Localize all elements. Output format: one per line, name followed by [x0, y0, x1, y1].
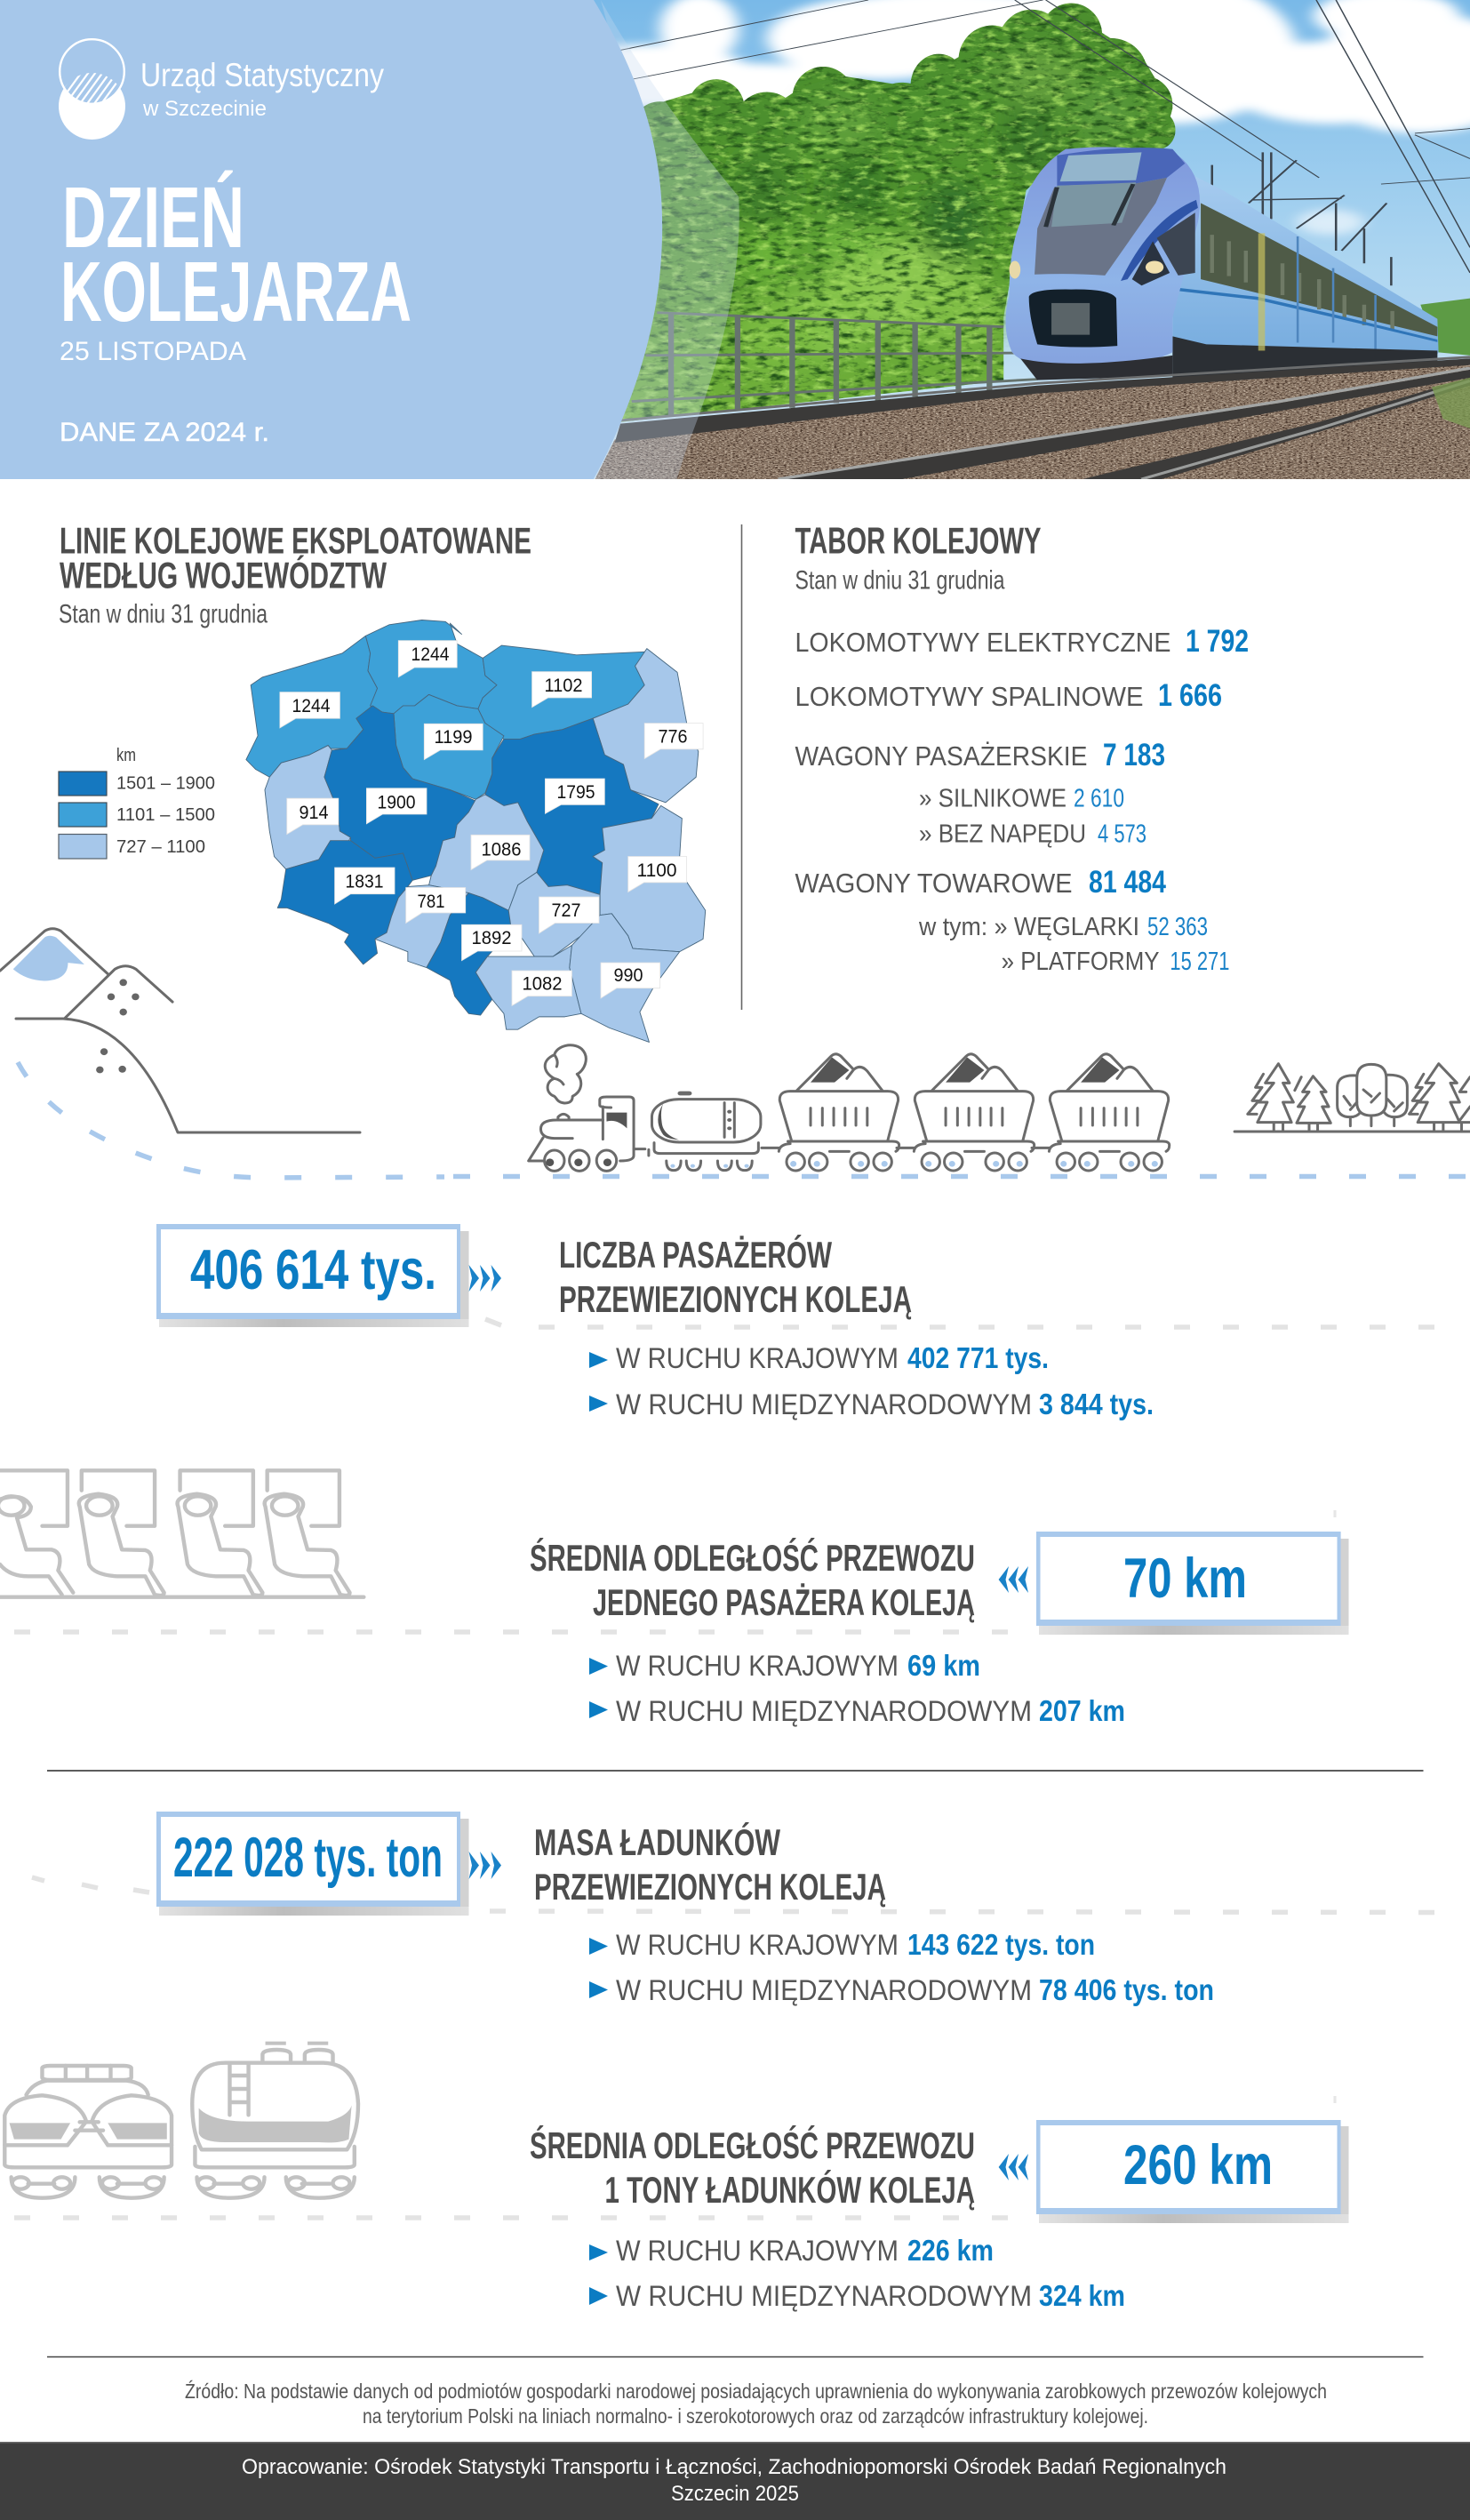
map of Poland: [246, 620, 706, 1042]
row: domestic freight: W RUCHU KRAJOWYM: [616, 1929, 899, 1961]
map legend: 1501 – 1900: [116, 773, 215, 793]
title: KOLEJARZA: [60, 244, 411, 340]
stat box: 70 km: [1036, 1532, 1349, 1635]
heading: freight mass: [534, 1820, 886, 1908]
row: flat wagons: 15 271: [1170, 948, 1229, 976]
stat box: 406 614 tys.: [156, 1224, 469, 1327]
callout: łódzkie: [471, 835, 530, 869]
footer band: [0, 2442, 1470, 2520]
callout: kujawsko-pomorskie: [424, 724, 483, 760]
panel: rolling stock: [795, 519, 1249, 976]
title: [60, 169, 411, 340]
row: freight wagons: WAGONY TOWAROWE: [795, 868, 1072, 899]
heading: number of passengers: PRZEWIEZIONYCH KOLEJĄ: [559, 1278, 912, 1320]
callout: dolnośląskie: 1831: [345, 871, 384, 892]
callout: warmińsko-mazurskie: [532, 672, 592, 708]
icon: mountains: [0, 929, 360, 1132]
row: coal wagons: 52 363: [1147, 913, 1208, 941]
callout: łódzkie: 1086: [482, 839, 521, 860]
foliage: [620, 4, 1176, 422]
icon: steam train: [529, 1045, 1170, 1171]
callout: podkarpackie: 990: [613, 965, 643, 986]
header panel: [0, 0, 662, 479]
row: diesel locomotives: 1 666: [1158, 678, 1222, 713]
heading: average distance per passenger: ŚREDNIA ODLEGŁOŚĆ PRZEWOZU: [530, 1536, 975, 1579]
callout: lubuskie: 914: [299, 803, 329, 823]
arrows: left: [999, 1566, 1028, 1593]
row: domestic passengers: [589, 1341, 1049, 1374]
callout: mazowieckie: [545, 779, 604, 813]
section: average passenger distance: [14, 1510, 1349, 1727]
map legend: 1101 – 1500: [116, 804, 215, 825]
row: international ton distance: W RUCHU MIĘDZYNARODOWYM: [616, 2280, 1032, 2312]
stat box: 406 614 tys.: 406 614 tys.: [190, 1239, 436, 1301]
logo: Urząd Statystyczny w Szczecinie: [46, 39, 384, 140]
section: average freight distance: [14, 2096, 1349, 2312]
callout: małopolskie: [512, 971, 571, 1005]
map legend: [59, 746, 215, 859]
callout: wielkopolskie: 1900: [377, 793, 416, 812]
source note: na terytorium Polski na liniach normalno- i szerokotorowych oraz od zarządców infrastruktury kolejowej.: [363, 2404, 1148, 2428]
callout: podkarpackie: [601, 963, 660, 998]
map legend: 727 – 1100: [116, 836, 205, 857]
callout: mazowieckie: 1795: [556, 782, 595, 803]
row: electric locomotives: 1 792: [1186, 624, 1249, 659]
subtitle: data year: DANE ZA 2024 r.: [60, 418, 269, 447]
icon: coal wagon 2: [915, 1054, 1060, 1171]
heading: average distance per ton: 1 TONY ŁADUNKÓW KOLEJĄ: [604, 2168, 975, 2211]
icon: coal wagon 3: [1050, 1054, 1170, 1171]
row: domestic distance: W RUCHU KRAJOWYM: [616, 1650, 899, 1682]
row: unpowered cars: 4 573: [1098, 820, 1146, 848]
icon: freight wagons: [4, 2042, 358, 2198]
icon: tank car: [651, 1092, 790, 1171]
callout: warmińsko-mazurskie: 1102: [544, 676, 583, 696]
stat box: 222 028 tys. ton: 222 028 tys. ton: [173, 1827, 443, 1889]
source note: [185, 2380, 1327, 2428]
heading: rolling stock: TABOR KOLEJOWY: [795, 519, 1042, 562]
callout: zachodniopomorskie: [280, 692, 340, 728]
heading: rolling stock: [795, 519, 1042, 596]
heading: railway lines: WEDŁUG WOJEWÓDZTW: [60, 554, 387, 596]
footer band: Szczecin 2025: [671, 2482, 799, 2506]
heading: railway lines: [59, 520, 531, 629]
heading: number of passengers: [559, 1233, 912, 1320]
callout: wielkopolskie: [366, 788, 427, 824]
icon: coal wagon 1: [779, 1054, 925, 1171]
row: unpowered cars: » BEZ NAPĘDU: [919, 820, 1086, 848]
callout: podlaskie: [644, 724, 703, 759]
map legend: km: [116, 746, 136, 765]
heading: freight mass: MASA ŁADUNKÓW: [534, 1820, 780, 1863]
icon: forest: [1234, 1064, 1470, 1132]
heading: average distance per ton: ŚREDNIA ODLEGŁOŚĆ PRZEWOZU: [530, 2124, 975, 2166]
callout: zachodniopomorskie: 1244: [292, 696, 331, 716]
row: international passengers: W RUCHU MIĘDZYNARODOWYM: [616, 1388, 1032, 1420]
row: international distance: W RUCHU MIĘDZYNARODOWYM: [616, 1695, 1032, 1727]
row: domestic ton distance: 226 km: [907, 2234, 994, 2267]
callout: śląskie: 1892: [471, 928, 512, 948]
heading: rolling stock: Stan w dniu 31 grudnia: [795, 565, 1005, 596]
row: international ton distance: 324 km: [1039, 2279, 1125, 2312]
stat box: 70 km: 70 km: [1123, 1548, 1247, 1610]
heading: number of passengers: LICZBA PASAŻERÓW: [559, 1233, 832, 1276]
row: motor cars: 2 610: [1074, 784, 1124, 812]
callout: świętokrzyskie: 727: [551, 900, 581, 921]
arrows: left: [999, 2154, 1028, 2180]
footer band: Opracowanie: Ośrodek Statystyki Transportu i Łączności, Zachodniopomorski Ośrodek Badań Regionalnych: [242, 2455, 1226, 2479]
row: domestic passengers: W RUCHU KRAJOWYM: [616, 1342, 899, 1374]
row: international distance: 207 km: [1039, 1694, 1125, 1727]
row: electric locomotives: LOKOMOTYWY ELEKTRYCZNE: [795, 627, 1171, 658]
row: passenger cars: WAGONY PASAŻERSKIE: [795, 740, 1088, 772]
arrows: right: [469, 1852, 501, 1879]
logo: Urząd Statystyczny w Szczecinie: Urząd Statystyczny: [140, 57, 384, 93]
callout: śląskie: [462, 924, 522, 961]
stat box: 260 km: 260 km: [1123, 2134, 1273, 2196]
row: motor cars: » SILNIKOWE: [919, 784, 1067, 812]
icon: steam: [545, 1045, 586, 1103]
photo: blue train on tracks: [541, 0, 1470, 479]
row: domestic passengers: 402 771 tys.: [907, 1341, 1049, 1374]
section: freight mass: [32, 1812, 1440, 2006]
map labels: [280, 641, 703, 1005]
heading: average distance per ton: [530, 2124, 975, 2211]
callout: świętokrzyskie: [539, 897, 599, 933]
callout: małopolskie: 1082: [523, 974, 562, 994]
callout: lubelskie: [628, 857, 687, 892]
icon: hopper wagon: [4, 2066, 172, 2198]
row: coal wagons: w tym: » WĘGLARKI: [918, 913, 1139, 941]
subtitle: date: 25 LISTOPADA: [60, 337, 246, 366]
callout: pomorskie: [398, 641, 457, 677]
callout: lubuskie: [287, 798, 339, 834]
row: domestic distance: 69 km: [907, 1649, 980, 1682]
icon: train seats: [0, 1470, 364, 1597]
arrows: right: [469, 1265, 501, 1292]
icon: locomotive: [529, 1097, 649, 1171]
icon: tank wagon: [192, 2042, 358, 2198]
callout: opolskie: 781: [418, 892, 444, 912]
row: domestic freight: 143 622 tys. ton: [907, 1928, 1095, 1961]
callout: opolskie: [406, 887, 466, 923]
callout: pomorskie: 1244: [411, 644, 450, 665]
row: flat wagons: » PLATFORMY: [1002, 948, 1160, 976]
row: international passengers: 3 844 tys.: [1039, 1388, 1154, 1420]
row: domestic ton distance: W RUCHU KRAJOWYM: [616, 2235, 899, 2267]
divider: vertical: [741, 524, 743, 1010]
row: diesel locomotives: LOKOMOTYWY SPALINOWE: [795, 681, 1143, 712]
heading: average distance per passenger: JEDNEGO PASAŻERA KOLEJĄ: [593, 1581, 975, 1623]
stat box: 260 km: [1036, 2120, 1349, 2223]
row: freight wagons: 81 484: [1089, 865, 1166, 900]
stat box: 222 028 tys. ton: [156, 1812, 469, 1916]
logo: Urząd Statystyczny w Szczecinie: w Szczecinie: [142, 97, 267, 121]
title: DZIEŃ: [62, 169, 244, 266]
row: domestic freight: [589, 1928, 1095, 1961]
heading: railway lines: LINIE KOLEJOWE EKSPLOATOWANE: [60, 520, 531, 562]
callout: lubelskie: 1100: [636, 860, 677, 881]
callout: kujawsko-pomorskie: 1199: [434, 727, 473, 748]
heading: railway lines: Stan w dniu 31 grudnia: [59, 600, 268, 629]
heading: freight mass: PRZEWIEZIONYCH KOLEJĄ: [534, 1866, 886, 1908]
row: international freight: 78 406 tys. ton: [1039, 1973, 1214, 2006]
rail line: dashed track: [18, 1062, 1470, 1178]
row: international freight: [589, 1973, 1214, 2006]
callout: dolnośląskie: [335, 868, 395, 904]
row: passenger cars: 7 183: [1103, 738, 1165, 772]
row: international freight: W RUCHU MIĘDZYNARODOWYM: [616, 1974, 1032, 2006]
heading: average distance per passenger: [530, 1536, 975, 1623]
callout: podlaskie: 776: [658, 727, 688, 747]
section: passengers carried: [156, 1224, 1440, 1420]
